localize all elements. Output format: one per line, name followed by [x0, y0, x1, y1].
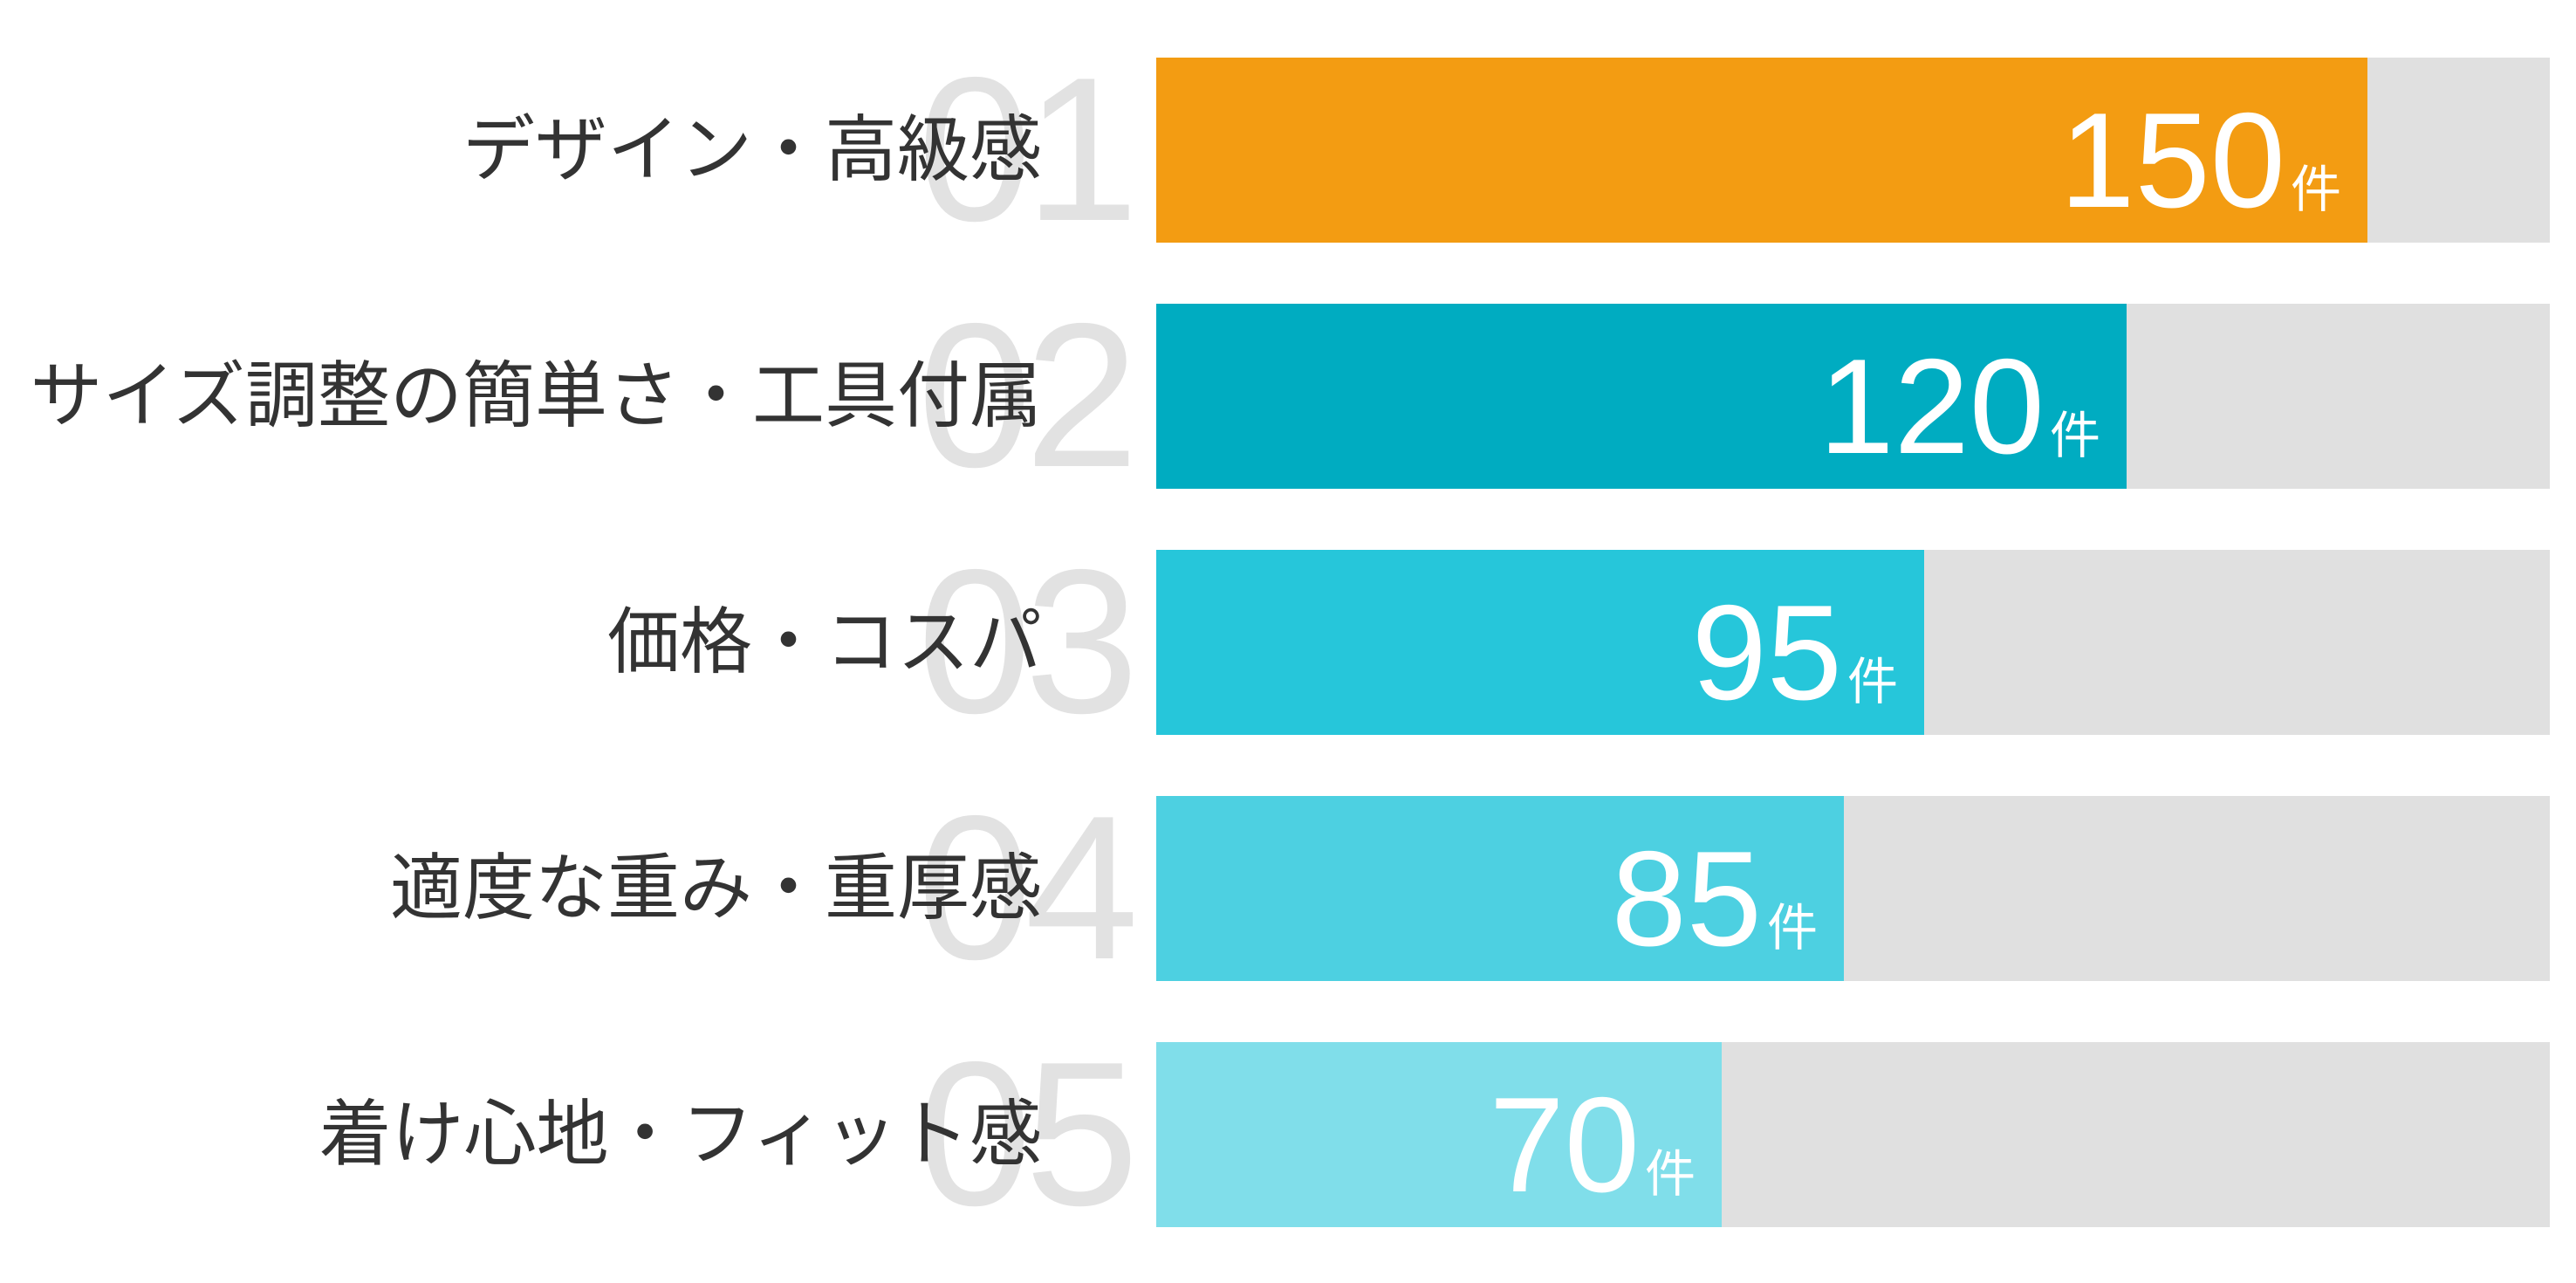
rank number 05: 05 [918, 1019, 1132, 1248]
label 05: 着け心地・フィット感 [319, 1094, 1042, 1175]
label 01: デザイン・高級感 [462, 109, 1042, 190]
rank number 02: 02 [918, 280, 1132, 510]
bar 04 [1156, 796, 2550, 981]
row 01 [462, 34, 2550, 264]
label 03: 価格・コスパ [607, 601, 1042, 683]
rank number 03: 03 [918, 526, 1132, 756]
bar 01: 150件 [2059, 85, 2341, 236]
bar 03 [1156, 550, 2550, 735]
bar 05 [1156, 1042, 2550, 1227]
rank number 04: 04 [918, 772, 1132, 1002]
row 05 [319, 1019, 2550, 1248]
bar 03: 95件 [1692, 577, 1898, 728]
rank number 01: 01 [918, 34, 1132, 264]
label 02: サイズ調整の簡単さ・工具付属 [30, 355, 1042, 436]
bar 01 [1156, 58, 2550, 243]
bar 02: 120件 [1819, 331, 2100, 482]
row 02 [30, 280, 2550, 510]
label 04: 適度な重み・重厚感 [390, 847, 1042, 929]
row 04 [390, 772, 2550, 1002]
bar 04: 85件 [1612, 823, 1818, 974]
bar 02 [1156, 304, 2550, 489]
row 03 [607, 526, 2550, 756]
bar 05: 70件 [1490, 1069, 1696, 1220]
